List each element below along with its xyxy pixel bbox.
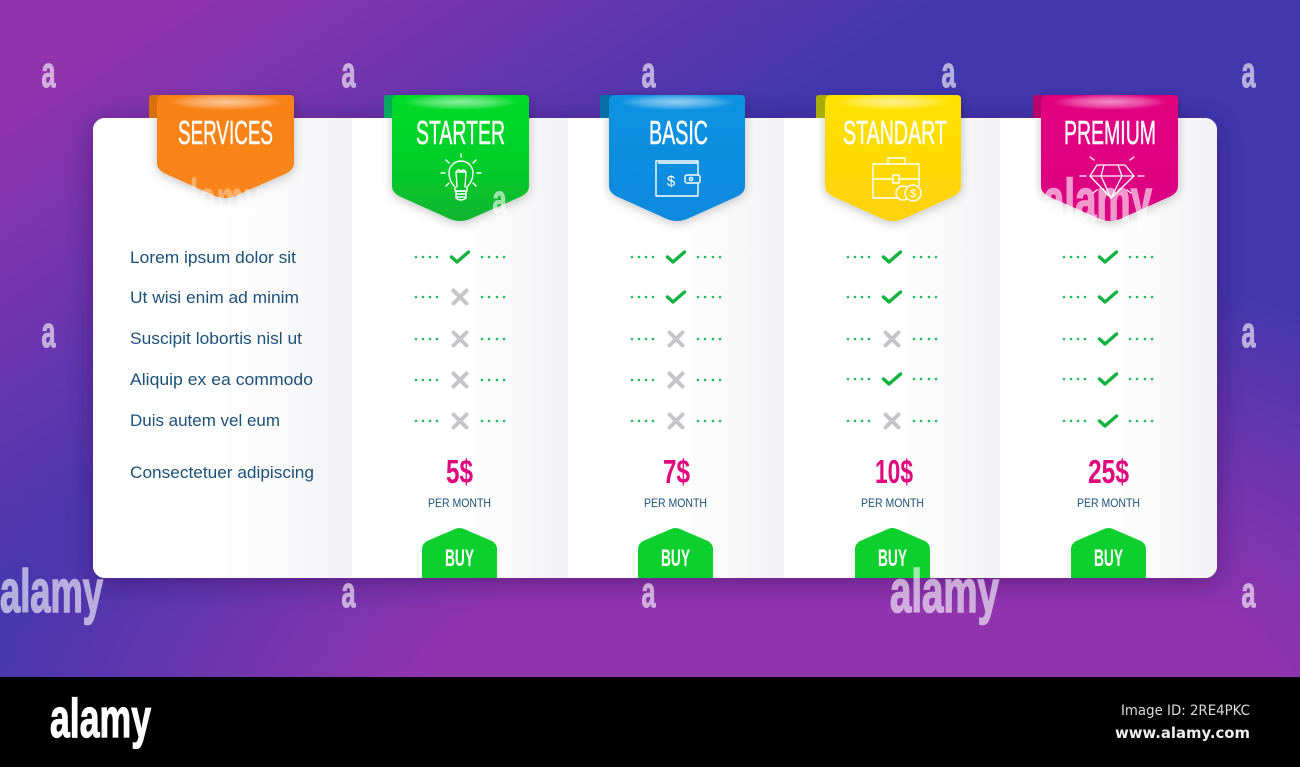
ribbon: standart — [816, 94, 961, 221]
ribbon: premium: PREMIUM — [1064, 114, 1156, 151]
buy button: standart: BUY — [878, 545, 907, 572]
buy button: starter: BUY — [445, 545, 474, 572]
watermarks — [0, 48, 1256, 625]
price: premium — [1077, 453, 1140, 510]
watermarks: a — [642, 568, 656, 617]
feature labels: Lorem ipsum dolor sit — [130, 248, 296, 267]
pricing table card — [93, 118, 1217, 578]
icon: briefcase with coins: $ — [910, 188, 916, 200]
ribbon: basic — [600, 94, 745, 221]
feature labels: Consectetuer adipiscing — [130, 463, 314, 482]
ribbon: services — [149, 94, 294, 198]
price: standart: PER MONTH — [861, 496, 924, 510]
feature labels: Ut wisi enim ad minim — [130, 288, 299, 307]
footer bar — [0, 677, 1300, 767]
watermarks: a — [42, 48, 56, 97]
feature marks: basic — [631, 252, 721, 428]
feature marks: premium — [1063, 252, 1153, 426]
price: premium: 25$ — [1088, 453, 1129, 490]
feature marks: standart — [847, 252, 937, 428]
watermarks: a — [1242, 568, 1256, 617]
price: starter: 5$ — [446, 453, 473, 490]
watermarks: a — [942, 48, 956, 97]
faint watermark on services ribbon: alamy — [172, 168, 262, 233]
price: basic — [644, 453, 707, 510]
icon: light bulb — [441, 154, 481, 200]
price: standart — [861, 453, 924, 510]
feature labels: Suscipit lobortis nisl ut — [130, 329, 302, 348]
icon: briefcase with coins — [873, 158, 921, 201]
buy button: starter — [422, 528, 497, 578]
ribbon: services: SERVICES — [178, 114, 273, 151]
watermarks: alamy — [1043, 168, 1152, 233]
price: premium: PER MONTH — [1077, 496, 1140, 510]
watermarks: alamy — [0, 558, 103, 625]
buy button: basic — [638, 528, 713, 578]
watermarks: a — [642, 48, 656, 97]
ribbon: starter: STARTER — [416, 114, 505, 151]
ribbon: starter — [384, 94, 529, 221]
watermarks: a — [1242, 48, 1256, 97]
icon: diamond — [1080, 157, 1144, 198]
feature labels — [130, 248, 314, 482]
buy button: premium: BUY — [1094, 545, 1123, 572]
ribbon: premium — [1033, 94, 1178, 221]
watermarks: a — [342, 48, 356, 97]
buy button: premium — [1071, 528, 1146, 578]
watermarks: alamy — [890, 558, 999, 625]
icon: wallet — [656, 161, 700, 196]
buy button: basic: BUY — [661, 545, 690, 572]
feature labels: Duis autem vel eum — [130, 411, 280, 430]
icon: wallet: $ — [667, 173, 676, 190]
price: standart: 10$ — [875, 453, 913, 490]
price: basic: 7$ — [663, 453, 690, 490]
ribbon: standart: STANDART — [843, 114, 947, 151]
feature labels: Aliquip ex ea commodo — [130, 370, 313, 389]
buy button: standart — [855, 528, 930, 578]
website: www.alamy.com — [1115, 724, 1250, 742]
price: starter — [428, 453, 491, 510]
footer logo: alamy — [50, 687, 151, 749]
watermarks: a — [342, 568, 356, 617]
watermarks: a — [42, 308, 56, 357]
price: basic: PER MONTH — [644, 496, 707, 510]
watermarks: a — [492, 178, 507, 222]
price: starter: PER MONTH — [428, 496, 491, 510]
image id: Image ID: 2RE4PKC — [1121, 703, 1250, 719]
watermarks: a — [1242, 308, 1256, 357]
ribbon: basic: BASIC — [649, 114, 708, 151]
feature marks: starter — [415, 252, 505, 428]
